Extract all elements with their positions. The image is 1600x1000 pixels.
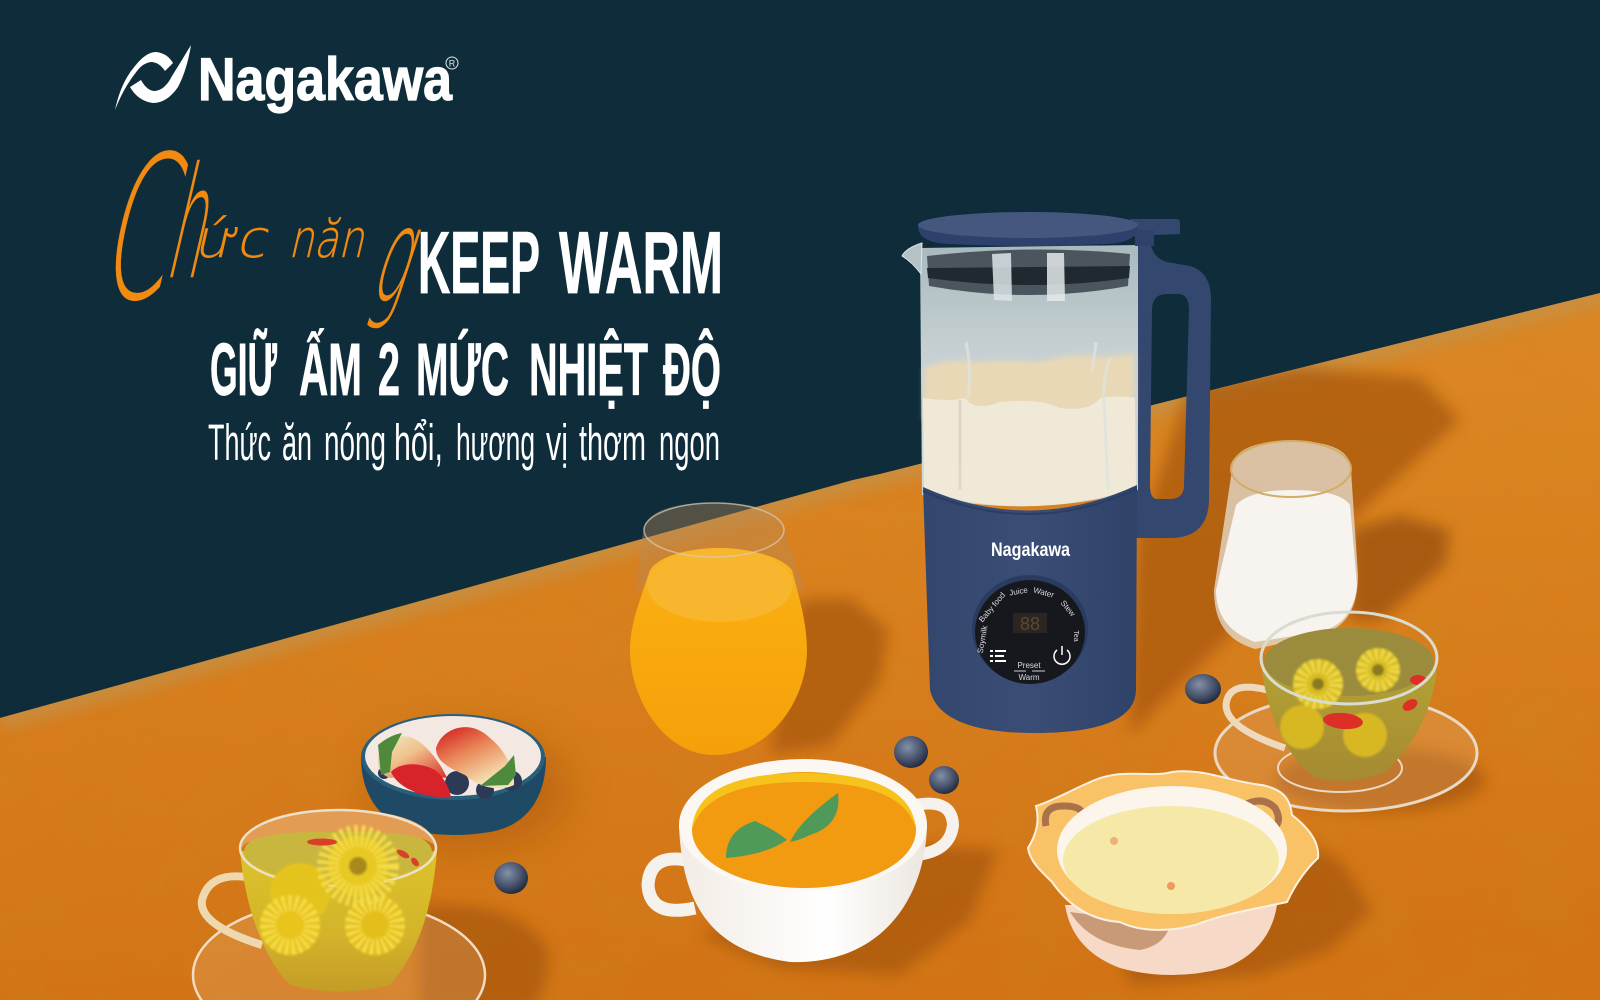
- icon: logo swoosh: [115, 45, 191, 110]
- glass upper wall: [636, 503, 805, 590]
- soup bowl: [648, 759, 953, 962]
- panel mode labels: Preset: [1017, 661, 1041, 670]
- strawberry leaves: [378, 733, 516, 786]
- cup body: [240, 850, 437, 992]
- blender handle: [1135, 240, 1211, 538]
- shadow: soup bowl: [700, 845, 998, 975]
- subheading: Thức: [208, 414, 271, 471]
- orange table surface: [0, 290, 1600, 1000]
- subheading: vị: [546, 414, 568, 471]
- chrysanthemum flowers: [1280, 648, 1400, 757]
- shadow: milk glass: [1350, 515, 1450, 620]
- panel display: 88: [1020, 614, 1040, 634]
- jar inner cover: [927, 249, 1130, 301]
- tea surface: [244, 822, 432, 882]
- shadow: left tea cup: [420, 905, 548, 1000]
- cup handle: [1226, 687, 1285, 748]
- blender jar glass: [920, 245, 1138, 506]
- heading: GIỮ ẤM 2 MỨC NHIỆT ĐỘ: MỨC: [416, 328, 509, 411]
- control panel: [972, 575, 1088, 684]
- milk upper foam: [924, 354, 1134, 420]
- saucer: [193, 900, 485, 1000]
- heading: script Chức năng: ức: [190, 209, 277, 270]
- tea surface: [1264, 628, 1434, 696]
- panel mode labels: Stew: [1059, 599, 1077, 618]
- heading: script Chức năng: h: [156, 134, 232, 313]
- heading: script Chức năng: C: [86, 115, 205, 346]
- bowl rim: [679, 759, 927, 891]
- bowl body: [679, 826, 927, 962]
- mint leaves: [726, 793, 838, 858]
- handle right: [915, 804, 953, 855]
- heading: GIỮ ẤM 2 MỨC NHIỆT ĐỘ: NHIỆT: [529, 328, 648, 411]
- milk body: [923, 396, 1136, 506]
- milk: [1216, 490, 1357, 642]
- handle left: [648, 859, 695, 910]
- heading: GIỮ ẤM 2 MỨC NHIỆT ĐỘ: GIỮ: [210, 328, 277, 411]
- cup body: [1262, 670, 1437, 781]
- blender lid: [918, 212, 1180, 246]
- logo: Nagakawa: [115, 45, 458, 113]
- shadow: juice glass: [770, 598, 888, 755]
- porridge bowl: [1028, 771, 1318, 975]
- blender: [902, 212, 1211, 733]
- shadow: right saucer: [1275, 748, 1485, 812]
- bowl yellow flange: [1028, 771, 1318, 930]
- pouring spout: [902, 243, 922, 274]
- juice glass: [630, 503, 807, 755]
- heading: script Chức năng: năn: [285, 210, 374, 270]
- milk splash streaks: [960, 342, 1110, 490]
- goji berries: [307, 838, 421, 868]
- bowl rim: [361, 714, 545, 800]
- bowl body: [1065, 905, 1277, 975]
- panel mode labels: [976, 585, 1079, 682]
- cup handle: [202, 876, 262, 945]
- strawberries: [378, 736, 447, 778]
- glass body: [1214, 441, 1358, 649]
- subheading: hổi,: [394, 414, 443, 471]
- gold rim: [1231, 441, 1351, 497]
- blueberries in bowl: [378, 767, 522, 799]
- panel mode labels: Tea: [1072, 630, 1079, 642]
- heading: GIỮ ẤM 2 MỨC NHIỆT ĐỘ: ĐỘ: [663, 328, 721, 411]
- bowl interior: [1057, 786, 1287, 914]
- subheading: thơm: [579, 414, 646, 471]
- heading: script Chức năng: g: [358, 181, 441, 332]
- goji berries: [1322, 675, 1426, 731]
- blender base: [923, 485, 1137, 733]
- blueberries: [494, 674, 1221, 894]
- shadow: strawberry bowl: [370, 730, 570, 850]
- icon: menu: [990, 651, 1006, 661]
- strawberry bowl: [361, 714, 546, 835]
- base brand label: Nagakawa: [991, 540, 1070, 561]
- shadow: porridge bowl: [1120, 830, 1372, 985]
- heading: KEEP WARM: KEEP: [418, 213, 540, 312]
- subheading: ăn: [282, 414, 312, 471]
- icon: power: [1054, 646, 1070, 664]
- soup: [692, 772, 916, 888]
- heading: GIỮ ẤM 2 MỨC NHIỆT ĐỘ: [210, 328, 721, 411]
- milk glass: [1214, 441, 1358, 649]
- panel mode labels: Soymilk: [976, 624, 990, 654]
- bowl interior: [365, 716, 541, 796]
- saucer: [1215, 695, 1477, 811]
- panel mode labels: Warm: [1018, 673, 1040, 682]
- registered mark: R: [449, 58, 456, 68]
- cup rim upper glass: [240, 810, 438, 850]
- subheading: ngon: [659, 414, 720, 471]
- heading: GIỮ ẤM 2 MỨC NHIỆT ĐỘ: 2: [378, 328, 400, 411]
- bowl body: [361, 757, 546, 835]
- shadow: blender: [1130, 368, 1460, 735]
- panel mode labels: Juice: [1009, 585, 1029, 598]
- subheading: nóng: [324, 414, 386, 471]
- subheading: [208, 414, 720, 471]
- heading: KEEP WARM: WARM: [559, 213, 723, 312]
- saucer foot ring: [1278, 744, 1402, 792]
- panel mode labels: Water: [1032, 586, 1055, 600]
- right tea cup and saucer: [1215, 612, 1477, 811]
- table shadows: [370, 368, 1485, 1000]
- cup rim: [1261, 612, 1437, 704]
- glass outline: [644, 503, 784, 557]
- left tea cup and saucer: [193, 810, 485, 1000]
- panel mode labels: Baby food: [977, 591, 1007, 624]
- juice surface: [647, 548, 793, 622]
- registered mark: [446, 57, 458, 69]
- porridge: [1063, 806, 1279, 914]
- chrysanthemum flowers: [260, 836, 405, 955]
- subheading: hương: [456, 414, 535, 471]
- flange ears: [1045, 801, 1278, 827]
- logo wordmark: Nagakawa: [198, 46, 453, 113]
- juice: [630, 548, 807, 755]
- heading: GIỮ ẤM 2 MỨC NHIỆT ĐỘ: ẤM: [299, 328, 362, 411]
- heading: script Chức năng: [86, 115, 441, 346]
